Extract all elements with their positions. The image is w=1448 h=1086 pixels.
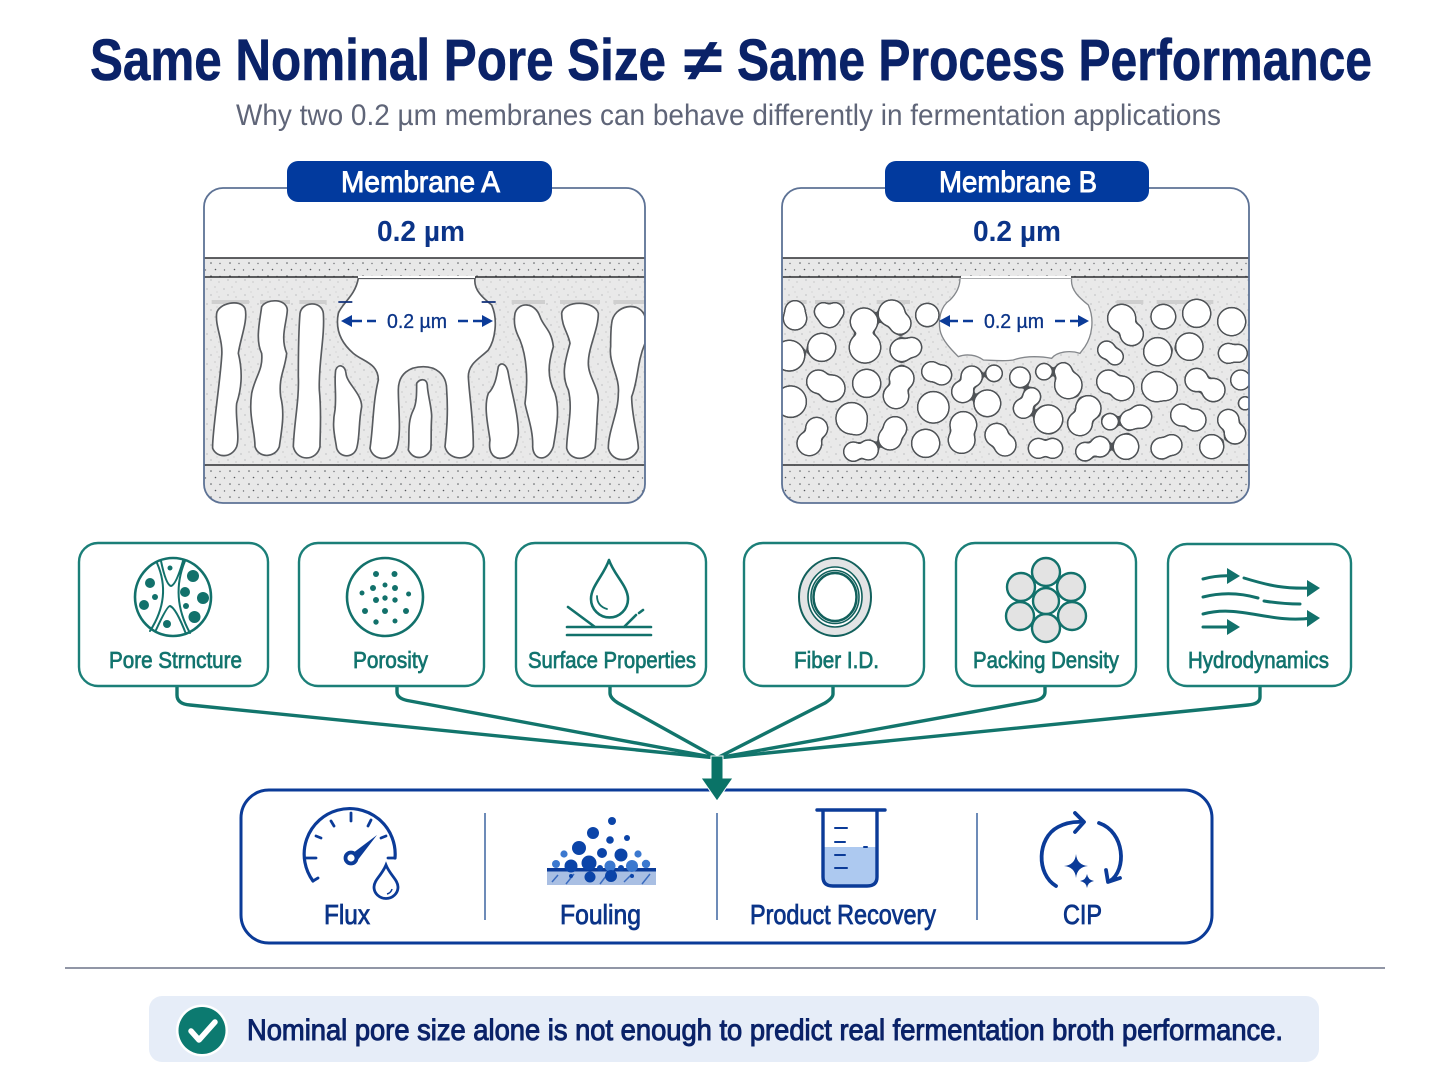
- icon: flux gauge: [304, 809, 398, 899]
- title: Same Nominal Pore Size: [90, 28, 666, 93]
- membrane A tag: [287, 161, 552, 202]
- membrane A nominal size: 0.2 µm: [377, 216, 465, 248]
- icon: pore structure: [135, 558, 211, 636]
- membrane A pore dimension: 0.2 µm: [387, 311, 447, 333]
- label: CIP: CIP: [1063, 899, 1102, 930]
- membrane B tag: [885, 161, 1149, 202]
- icon: CIP cycle: [1042, 813, 1121, 888]
- label: flux: Flux: [324, 899, 370, 930]
- icon: fiber cross-section: [799, 558, 871, 636]
- membrane A pores: [212, 278, 645, 460]
- panel: membrane A: [204, 161, 645, 505]
- label: pore structure: Pore Strncture: [109, 647, 242, 673]
- icon: beaker: [817, 810, 885, 886]
- card: packing density: [956, 543, 1136, 686]
- arrow: convergence down: [701, 756, 733, 801]
- label: product recovery: Product Recovery: [750, 899, 936, 930]
- icon: flow arrows: [1203, 568, 1320, 635]
- icon: check mark: [176, 1004, 228, 1056]
- icon: packed fibers: [1006, 558, 1086, 642]
- membrane A pore dimension: [341, 311, 493, 333]
- title: [90, 28, 1372, 93]
- membrane A tag: Membrane A: [341, 166, 500, 199]
- label: fiber I.D.: Fiber I.D.: [794, 647, 879, 673]
- title: ≠: [684, 28, 722, 93]
- connector lines: [177, 687, 1260, 758]
- membrane B pore dimension: 0.2 µm: [984, 311, 1044, 333]
- panel: membrane B: [776, 161, 1250, 505]
- label: surface properties: Surface Properties: [528, 647, 696, 673]
- card: hydrodynamics: [1168, 544, 1351, 686]
- icon: porosity: [347, 558, 423, 636]
- callout text: Nominal pore size alone is not enough to predict real fermentation broth performance.: [247, 1014, 1283, 1047]
- membrane B tag: Membrane B: [939, 166, 1097, 199]
- label: hydrodynamics: Hydrodynamics: [1188, 647, 1329, 673]
- callout: key takeaway: [149, 996, 1319, 1062]
- card: porosity: [299, 543, 484, 686]
- card: pore structure: [79, 543, 268, 686]
- icon: surface droplet: [567, 560, 651, 635]
- membrane B nominal size: 0.2 µm: [973, 216, 1061, 248]
- label: fouling: Fouling: [560, 899, 641, 930]
- panel: outcomes: [241, 790, 1212, 943]
- membrane B pore dimension: [939, 311, 1089, 333]
- card: fiber I.D.: [744, 543, 924, 686]
- subtitle: Why two 0.2 µm membranes can behave differently in fermentation applications: [236, 99, 1221, 132]
- card: surface properties: [516, 543, 706, 686]
- membrane B pores: [776, 278, 1250, 460]
- icon: fouling particles: [547, 817, 656, 885]
- label: porosity: Porosity: [353, 647, 428, 673]
- label: packing density: Packing Density: [973, 647, 1119, 673]
